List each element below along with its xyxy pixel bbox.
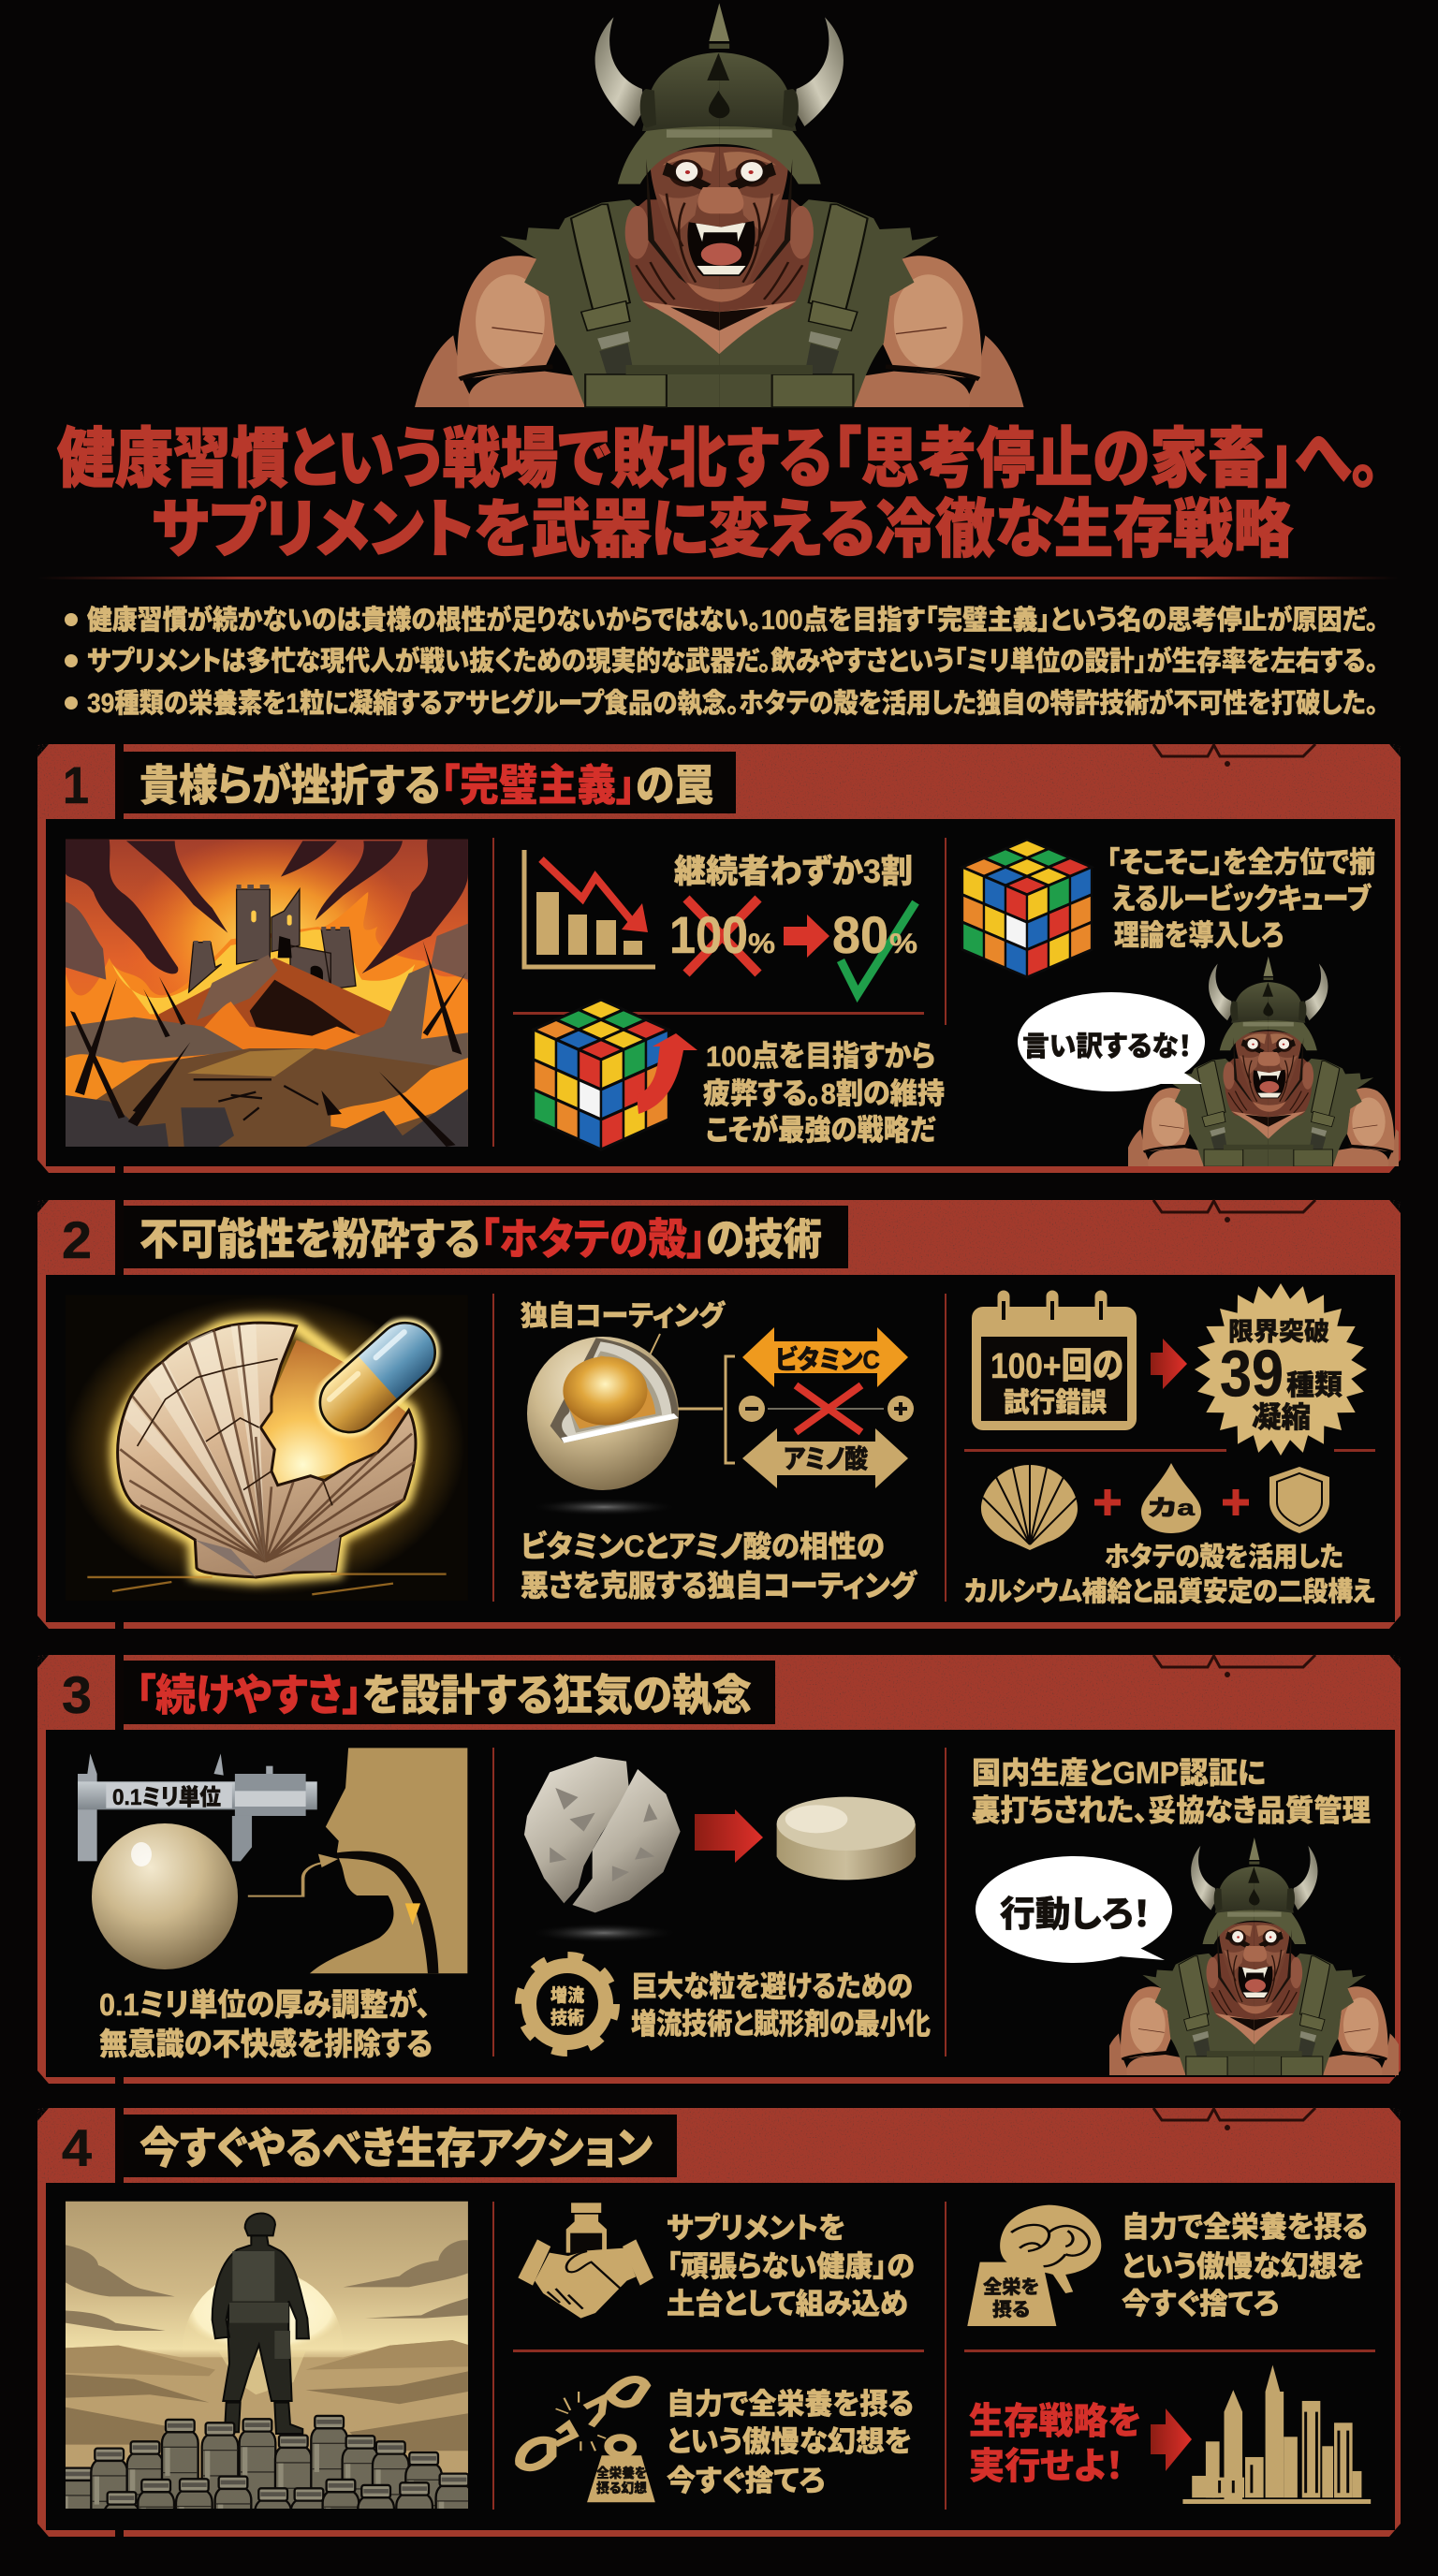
divider xyxy=(513,2349,924,2352)
title divider line xyxy=(37,577,1399,579)
brain weight label: 摂る xyxy=(992,2299,1030,2320)
declining chart icon xyxy=(524,850,655,967)
text: quality control: 裏打ちされた、妥協なき品質管理 xyxy=(972,1793,1371,1827)
illustration: broken scallop and capsule xyxy=(66,1295,468,1601)
speech bubble: 行動しろ！ xyxy=(1000,1895,1151,1935)
100 percent crossed out xyxy=(669,899,775,973)
calendar icon xyxy=(972,1296,1137,1430)
double arrow: vitamin C xyxy=(742,1327,908,1387)
shield icon xyxy=(1269,1467,1329,1533)
red arrow xyxy=(784,915,829,958)
column divider xyxy=(945,2202,946,2510)
title xyxy=(57,422,1380,565)
text: rubik theory: えるルービックキューブ xyxy=(1112,883,1372,915)
text: discard illusion right xyxy=(1122,2211,1368,2320)
speech bubble xyxy=(976,1856,1172,1963)
column divider xyxy=(492,1294,494,1602)
double arrow: amino acid: アミノ酸 xyxy=(784,1444,868,1473)
text: coating explanation: ビタミンCとアミノ酸の相性の xyxy=(521,1530,885,1563)
text: two-stage: カルシウム補給と品質安定の二段構え xyxy=(964,1576,1375,1607)
call to action xyxy=(969,2402,1141,2487)
text: quality control: 国内生産とGMP認証に xyxy=(972,1756,1266,1790)
gear icon: 技術 xyxy=(550,2008,584,2028)
divider xyxy=(964,1449,1226,1452)
brain weight label: 全栄を xyxy=(983,2276,1039,2298)
mini warrior xyxy=(1099,1837,1410,2076)
calendar icon: 試行錯誤 xyxy=(1004,1387,1107,1418)
hero: angry horned soldier xyxy=(415,3,1024,407)
label: 0.1 mm: 0.1ミリ単位 xyxy=(112,1784,221,1810)
panel 1: perfectionism trap: 1 xyxy=(63,755,89,814)
text: granulation xyxy=(631,1970,931,2041)
column divider xyxy=(492,838,494,1147)
throat profile xyxy=(248,1748,467,1973)
cube with red arrow xyxy=(534,1000,697,1149)
double arrow: amino acid xyxy=(742,1428,908,1488)
broken chain with weight xyxy=(520,2379,655,2502)
100 percent crossed out: 100 xyxy=(669,905,748,964)
illustration: burning castle xyxy=(66,833,468,1147)
weight label: 全栄養を xyxy=(596,2466,647,2481)
text: rubik theory: 「そこそこ」を全方位で揃 xyxy=(1107,846,1375,879)
red arrow xyxy=(1151,2408,1192,2471)
text: rubik theory: 理論を導入しろ xyxy=(1114,919,1284,952)
text: quality control xyxy=(972,1756,1371,1827)
text: aim for 80 xyxy=(703,1040,945,1147)
text: two-stage: ホタテの殻を活用した xyxy=(1105,1542,1343,1573)
panel 3: ease of continuing: 3 xyxy=(62,1665,92,1724)
text: supplement foundation: 土台として組み込め xyxy=(667,2288,908,2320)
double arrow: vitamin C: ビタミンC xyxy=(775,1344,880,1374)
red arrow xyxy=(695,1809,763,1863)
text: supplement foundation: サプリメントを xyxy=(667,2212,845,2245)
text: discard illusion: という傲慢な幻想を xyxy=(667,2425,912,2458)
city skyline xyxy=(1182,2365,1371,2504)
panel 1 heading: 貴様らが挫折する「完璧主義」の罠 xyxy=(139,761,713,810)
starburst badge xyxy=(1195,1283,1367,1456)
call to action: 生存戦略を xyxy=(969,2402,1141,2442)
divider xyxy=(964,2349,1375,2352)
caliper xyxy=(78,1753,317,1861)
panel 3 heading: 「続けやすさ」を設計する狂気の執念 xyxy=(136,1671,752,1720)
text: thickness xyxy=(99,1987,433,2061)
panel 2: scallop technology xyxy=(37,1200,1401,1629)
incompatibility cross xyxy=(739,1385,914,1432)
text: aim for 80: 疲弊する。8割の維持 xyxy=(703,1077,945,1110)
connector line and bracket xyxy=(678,1356,735,1463)
cracked rock xyxy=(524,1757,681,1912)
panel 4: survival actions xyxy=(37,2108,1401,2576)
weight label: 摂る幻想 xyxy=(596,2481,647,2496)
weight label xyxy=(596,2466,647,2496)
speech bubble xyxy=(1018,992,1205,1091)
flat tablet xyxy=(777,1797,916,1880)
brain weight label xyxy=(983,2276,1039,2320)
80 percent checked xyxy=(832,902,917,994)
text: two-stage xyxy=(964,1542,1375,1607)
panel 2 heading: 不可能性を粉砕する「ホタテの殻」の技術 xyxy=(139,1215,822,1264)
text: discard illusion xyxy=(667,2388,914,2497)
text: thickness: 0.1ミリ単位の厚み調整が、 xyxy=(99,1987,431,2022)
text: coating label: 独自コーティング xyxy=(521,1300,726,1332)
text: thickness: 無意識の不快感を排除する xyxy=(99,2027,433,2061)
starburst badge: 39 xyxy=(1220,1337,1284,1410)
text: rubik theory xyxy=(1107,846,1375,952)
starburst badge: 限界突破 xyxy=(1228,1318,1329,1346)
text: aim for 80: こそが最強の戦略だ xyxy=(706,1114,936,1147)
text: coating explanation xyxy=(521,1530,917,1603)
cutaway capsule sphere xyxy=(527,1334,679,1490)
divider xyxy=(513,1012,924,1015)
calendar icon: 100+回の xyxy=(990,1347,1123,1386)
panel 1: perfectionism trap xyxy=(37,744,1415,1173)
column divider xyxy=(945,838,946,1025)
text: aim for 80: 100点を目指すから xyxy=(706,1040,935,1073)
column divider xyxy=(945,1294,946,1602)
column divider xyxy=(492,1748,494,2056)
handshake and bottle icon xyxy=(518,2203,653,2319)
starburst badge: 種類 xyxy=(1286,1370,1343,1401)
starburst badge: 凝縮 xyxy=(1252,1401,1311,1434)
text: discard illusion: 自力で全栄養を摂る xyxy=(667,2388,914,2421)
rubik cube icon xyxy=(962,840,1092,977)
text: coating explanation: 悪さを克服する独自コーティング xyxy=(521,1569,917,1603)
panel 4 heading: 今すぐやるべき生存アクション xyxy=(139,2124,653,2173)
panel 3: ease of continuing xyxy=(37,1655,1410,2084)
text: discard illusion: 今すぐ捨てろ xyxy=(667,2465,825,2497)
red arrow xyxy=(1151,1339,1187,1389)
column divider xyxy=(945,1748,946,2056)
mini warrior xyxy=(1123,957,1415,1166)
illustration: soldier on supplement jars xyxy=(66,2202,468,2509)
panel 4: survival actions: 4 xyxy=(62,2118,92,2177)
text: granulation: 巨大な粒を避けるための xyxy=(631,1970,913,2003)
call to action: 実行せよ！ xyxy=(969,2447,1123,2487)
80 percent checked: 80 xyxy=(832,905,888,964)
tablet sphere xyxy=(92,1823,238,1969)
gear icon xyxy=(521,1957,614,2051)
summary bullets xyxy=(65,604,1378,719)
soft shadow xyxy=(534,1924,674,1942)
brain and weight icon xyxy=(967,2205,1101,2326)
text: only 30% continue: 継続者わずか3割 xyxy=(674,854,913,890)
plus xyxy=(1094,1489,1121,1515)
gear icon: 増流 xyxy=(550,1984,584,2006)
calcium drop: カa xyxy=(1148,1496,1196,1521)
scallop icon xyxy=(981,1465,1078,1550)
column divider xyxy=(492,2202,494,2510)
text: discard illusion right: 今すぐ捨てろ xyxy=(1122,2288,1279,2320)
text: discard illusion right: 自力で全栄養を摂る xyxy=(1122,2211,1368,2244)
80 percent checked: % xyxy=(889,929,917,959)
text: supplement foundation: 「頑張らない健康」の xyxy=(667,2250,915,2283)
text: granulation: 増流技術と賦形剤の最小化 xyxy=(631,2008,931,2041)
calcium drop xyxy=(1141,1463,1201,1533)
text: discard illusion right: という傲慢な幻想を xyxy=(1122,2250,1364,2283)
panel 2: scallop technology: 2 xyxy=(62,1210,92,1269)
title: サプリメントを武器に変える冷徹な生存戦略 xyxy=(152,494,1293,565)
plus xyxy=(1223,1489,1249,1515)
soft shadow xyxy=(534,1499,674,1515)
100 percent crossed out: % xyxy=(748,929,775,959)
speech bubble: 言い訳するな！ xyxy=(1022,1032,1192,1062)
text: supplement foundation xyxy=(667,2212,915,2320)
